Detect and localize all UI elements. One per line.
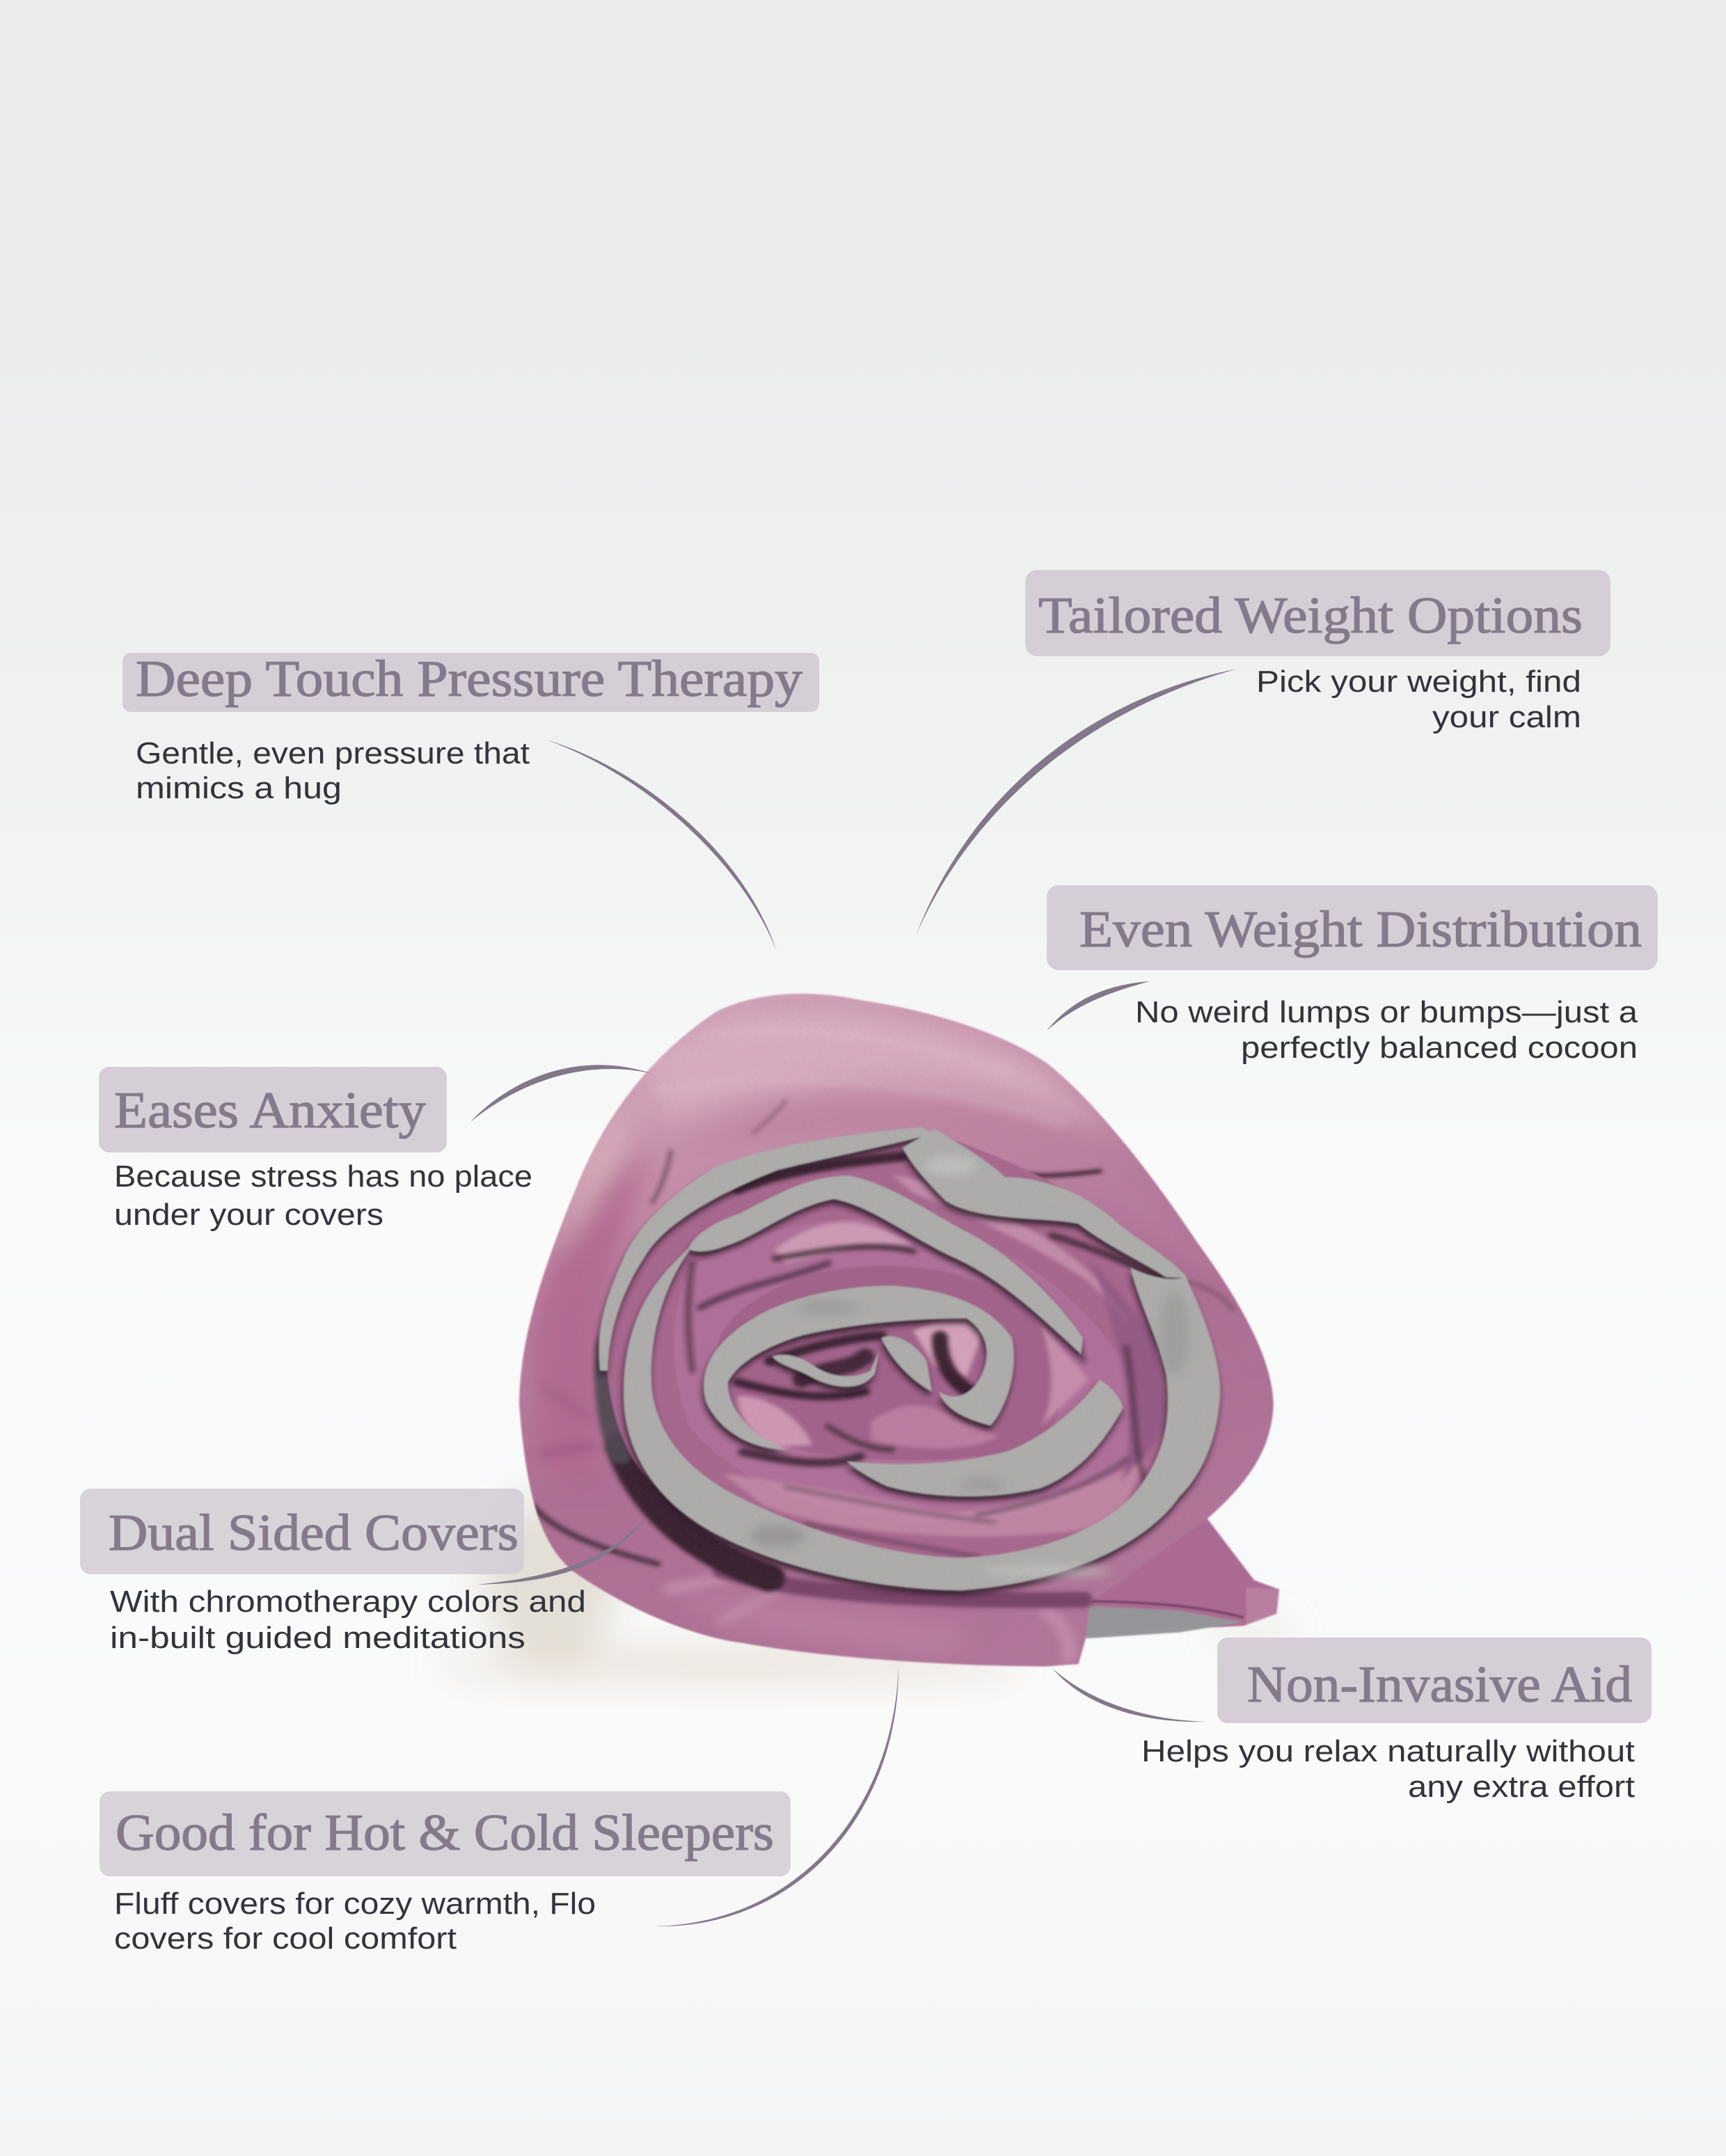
- description: Helps you relax naturally without: [1141, 1734, 1635, 1768]
- description: Fluff covers for cozy warmth, Flo: [114, 1887, 596, 1921]
- heading: Good for Hot & Cold Sleepers: [116, 1805, 774, 1862]
- blanket flap, lower right: [1068, 1517, 1279, 1638]
- heading: Non-Invasive Aid: [1247, 1656, 1632, 1713]
- tag: [1047, 885, 1658, 970]
- horizontal quilting folds: [541, 1030, 1069, 1659]
- callout: Eases Anxiety: [99, 1065, 653, 1232]
- tag: [122, 653, 819, 712]
- heading: Deep Touch Pressure Therapy: [136, 651, 802, 708]
- callouts: [80, 570, 1658, 1956]
- tag: [1025, 570, 1610, 656]
- callout: Non-Invasive Aid: [1052, 1638, 1652, 1804]
- heading: Eases Anxiety: [114, 1082, 426, 1139]
- callout: Good for Hot and Cold Sleepers: covers for cool comfort: [114, 1921, 457, 1956]
- arrow: [470, 1065, 653, 1122]
- band shading: [751, 1156, 1188, 1578]
- spiral interior: [606, 1133, 1214, 1585]
- callout: Good for Hot and Cold Sleepers: [100, 1667, 898, 1956]
- callout: Even Weight Distribution: perfectly balanced cocoon: [1241, 1031, 1638, 1065]
- fabric texture: [670, 1159, 962, 1580]
- dark wrinkles: [688, 1156, 1169, 1557]
- heading: Tailored Weight Options: [1038, 587, 1583, 644]
- description: Because stress has no place: [114, 1159, 532, 1194]
- callout: Even Weight Distribution: [1047, 885, 1658, 1065]
- description: No weird lumps or bumps—just a: [1135, 995, 1638, 1029]
- heading: Dual Sided Covers: [109, 1505, 518, 1562]
- arrow: [1052, 1668, 1206, 1722]
- arrow: [916, 669, 1237, 935]
- arrow: [477, 1517, 647, 1585]
- callout: Tailored Weight Options: your calm: [1432, 700, 1581, 734]
- ground shadow: [438, 1496, 1288, 1674]
- description: With chromotherapy colors and: [110, 1585, 586, 1619]
- tag: [80, 1489, 524, 1574]
- tag: [1217, 1638, 1652, 1723]
- arrow: [1047, 981, 1150, 1031]
- blanket roll body: [519, 994, 1276, 1666]
- shadow between roll layers: [532, 1100, 1233, 1600]
- arrow: [654, 1667, 898, 1926]
- callout: Dual Sided Covers: [80, 1489, 647, 1655]
- description: Pick your weight, find: [1256, 665, 1581, 699]
- heading: Even Weight Distribution: [1079, 901, 1642, 958]
- callout: Non-Invasive Aid: any extra effort: [1408, 1770, 1635, 1804]
- callout: Deep Touch Pressure Therapy: [122, 651, 819, 951]
- tag: [99, 1067, 447, 1152]
- gray edge bands: [599, 1127, 1220, 1590]
- photo: rolled weighted blanket: [509, 983, 1286, 1673]
- callout: Deep Touch Pressure Therapy: mimics a hug: [136, 771, 342, 805]
- callout: Eases Anxiety: under your covers: [114, 1198, 383, 1232]
- tag: [100, 1791, 791, 1876]
- callout: Dual Sided Covers: in-built guided meditations: [110, 1621, 525, 1655]
- callout: Tailored Weight Options: [916, 570, 1610, 935]
- arrow: [546, 740, 777, 951]
- description: Gentle, even pressure that: [136, 736, 530, 770]
